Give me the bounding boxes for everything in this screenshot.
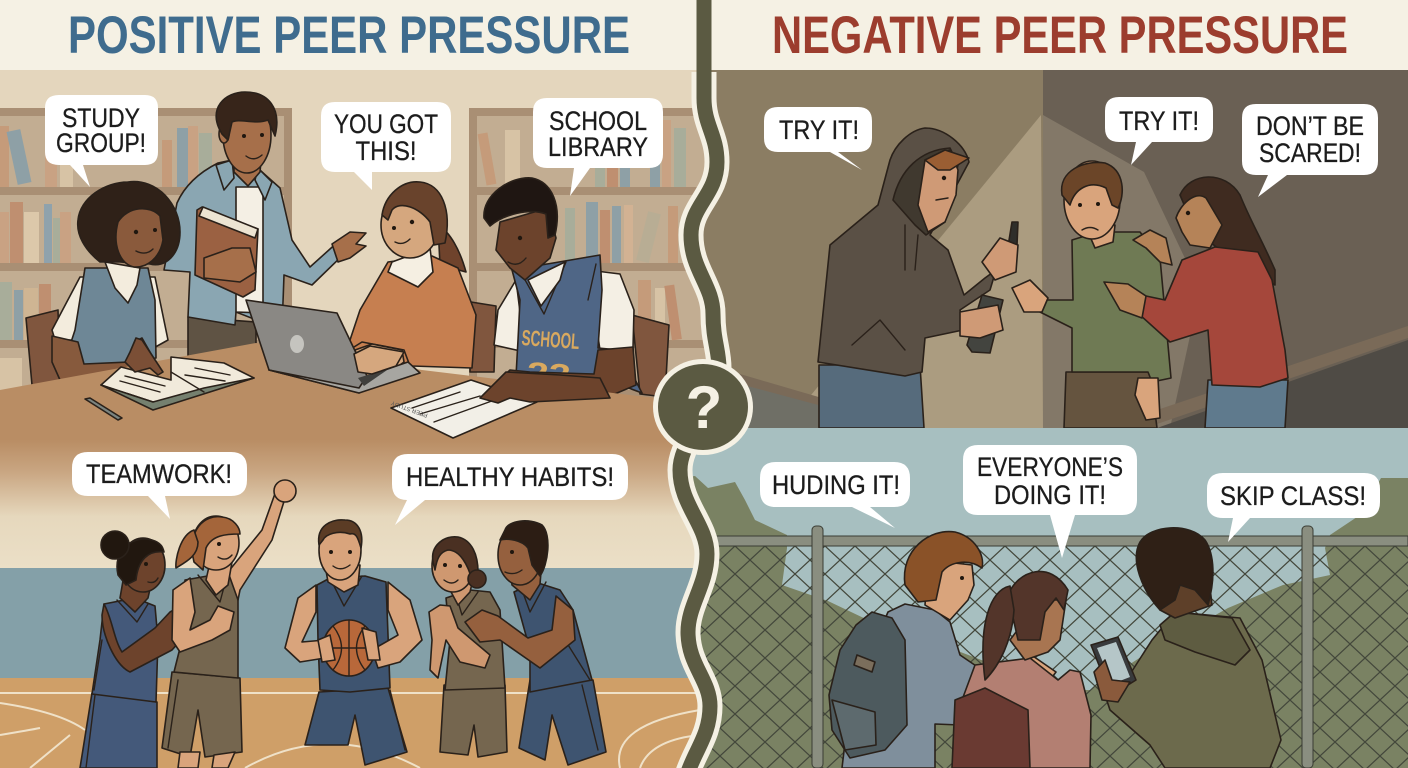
hand with pencil [125, 338, 163, 375]
alley wall left [680, 70, 1044, 428]
student: standing boy with book [164, 92, 366, 360]
left bookshelf [0, 108, 292, 398]
wavy center divider [680, 0, 719, 768]
library wall [0, 70, 730, 470]
floor [740, 326, 1408, 428]
player: girl clapping [429, 537, 507, 757]
speech bubble: teamwork: TEAMWORK! [86, 459, 232, 489]
speech bubble: don't be scared: DON’T BE [1256, 111, 1364, 141]
worksheet [391, 380, 537, 438]
speech bubble: study group: GROUP! [56, 128, 146, 158]
worried boy [1012, 161, 1171, 428]
speech bubble: healthy habits: HEALTHY HABITS! [406, 462, 614, 492]
schoolyard sky [692, 428, 1408, 690]
speech bubble: you got this: THIS! [356, 136, 416, 166]
speech bubble: don't be scared: SCARED! [1259, 138, 1361, 168]
speech bubble: huding it [760, 462, 910, 528]
student: boy in school jersey: 23 [526, 357, 572, 393]
table [0, 343, 730, 442]
student: boy in school jersey: SCHOOL [521, 325, 580, 354]
right bookshelf [469, 108, 730, 398]
player: boy with basketball [285, 520, 422, 765]
open notebook [101, 357, 254, 410]
chain-link fence [680, 526, 1408, 768]
gym wall [0, 440, 730, 568]
speech bubble: try it right: TRY IT! [1119, 106, 1199, 136]
panel: positive peer pressure [0, 70, 730, 768]
speech bubble: everyone's doing it [963, 445, 1137, 558]
gym blue stripe [0, 568, 730, 678]
speech bubble: study group [45, 95, 158, 187]
speech bubble: try it left [764, 107, 872, 170]
heading: positive peer pressure: POSITIVE PEER PRESSURE [68, 6, 630, 65]
student: girl in orange sweater [346, 182, 496, 374]
speech bubble: try it right [1105, 97, 1213, 165]
pen on table [85, 398, 122, 420]
girl in red hoodie [1104, 177, 1288, 428]
title band patch [0, 0, 1408, 70]
speech bubble: skip class: SKIP CLASS! [1220, 481, 1366, 511]
speech bubble: school library: LIBRARY [548, 132, 648, 162]
speech bubble: don't be scared [1242, 104, 1378, 197]
typing hands [354, 346, 404, 374]
boy with phone [1091, 528, 1281, 768]
student: girl with curly hair [26, 182, 180, 385]
speech bubble: teamwork [72, 452, 247, 519]
boy with backpack [829, 532, 1056, 768]
gym floor [0, 678, 730, 768]
alley wall right [1043, 70, 1408, 428]
student: boy in school jersey [482, 178, 669, 402]
light cone [784, 115, 1200, 428]
hand on worksheet [480, 372, 610, 403]
speech bubble: try it left: TRY IT! [779, 115, 859, 145]
speech bubble: you got this [321, 102, 451, 190]
laptop [246, 300, 420, 393]
player: girl raising fist [162, 480, 296, 768]
speech bubble: everyone's doing it: DOING IT! [994, 480, 1106, 510]
panel: negative peer pressure [680, 70, 1408, 768]
speech bubble: healthy habits [392, 454, 628, 525]
player: boy clapping [465, 521, 606, 765]
speech bubble: school library: SCHOOL [549, 106, 647, 136]
speech bubble: study group: STUDY [62, 103, 140, 133]
worksheet: PEER STUDY [391, 399, 429, 418]
speech bubble: huding it: HUDING IT! [772, 470, 900, 500]
question mark badge: ? [686, 374, 722, 441]
question mark badge [653, 359, 753, 455]
player: girl with bun [80, 531, 197, 768]
hooded figure [818, 128, 1018, 428]
tree line [680, 476, 1408, 768]
speech bubble: school library [533, 98, 663, 196]
girl with ponytail [952, 571, 1091, 768]
speech bubble: you got this: YOU GOT [334, 109, 438, 139]
speech bubble: skip class [1207, 473, 1380, 542]
speech bubble: everyone's doing it: EVERYONE’S [977, 452, 1123, 482]
